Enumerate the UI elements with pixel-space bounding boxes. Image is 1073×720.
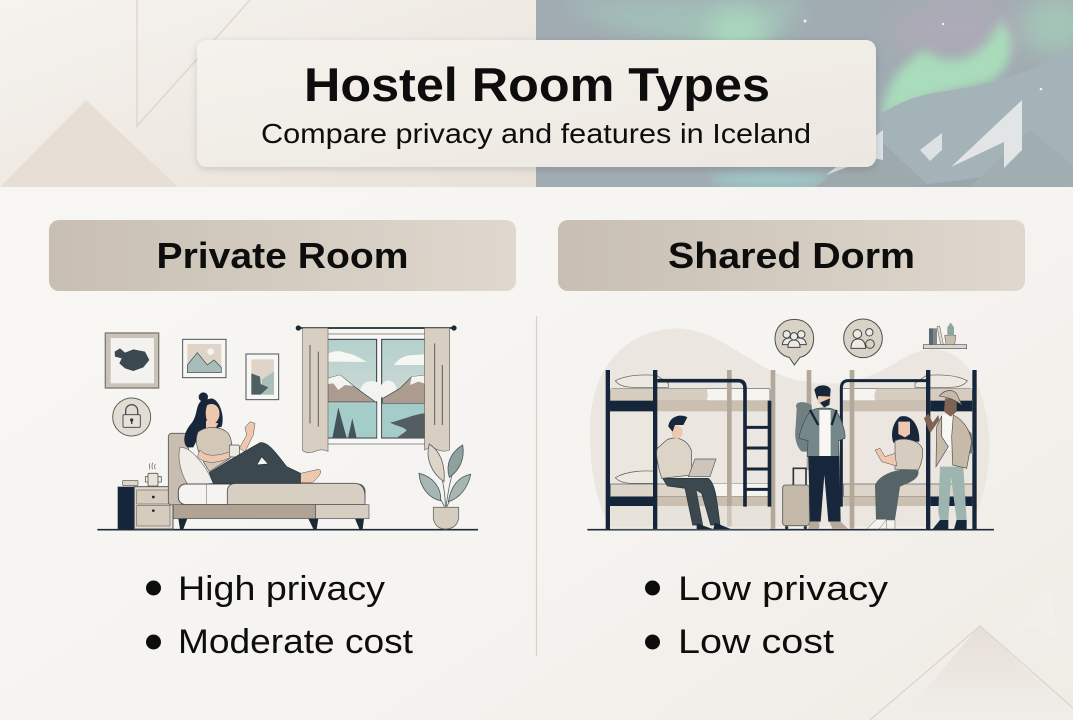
seated woman bbox=[867, 416, 923, 529]
bullet: moderate cost: Moderate cost bbox=[178, 623, 414, 661]
illustration: shared dorm bbox=[587, 319, 994, 530]
panel heading: Private Room: Private Room bbox=[156, 235, 408, 276]
header banner: left neutral mountains bbox=[0, 0, 536, 187]
framed mountain picture bbox=[183, 339, 226, 378]
illustration: private room bbox=[97, 325, 478, 530]
icon: two people bbox=[844, 319, 882, 358]
person relaxing on bed bbox=[184, 392, 321, 483]
window with view bbox=[323, 334, 430, 444]
bottom right decorative mountains bbox=[870, 585, 1073, 720]
background blob bbox=[590, 328, 989, 527]
panel heading: Shared Dorm bbox=[558, 220, 1025, 291]
framed river picture bbox=[246, 354, 279, 400]
nightstand with mug bbox=[118, 463, 173, 529]
person with laptop bbox=[657, 416, 731, 529]
floor line bbox=[97, 527, 478, 532]
standing woman with hat bbox=[924, 390, 973, 529]
bed bbox=[168, 433, 369, 529]
icon: padlock bbox=[113, 398, 151, 436]
title: Hostel Room Types bbox=[304, 58, 770, 111]
speech bubble: group icon bbox=[775, 319, 814, 365]
framed map of Iceland bbox=[105, 333, 159, 388]
plant bbox=[419, 444, 471, 529]
bullet: high privacy: High privacy bbox=[178, 570, 385, 608]
curtain rod bbox=[296, 325, 457, 331]
curtains bbox=[303, 328, 450, 453]
bullet: low cost: Low cost bbox=[678, 623, 835, 661]
title card bbox=[197, 40, 876, 167]
wall shelf bbox=[923, 323, 967, 349]
suitcase bbox=[783, 468, 809, 529]
feature list: shared dorm bbox=[645, 570, 888, 661]
subtitle: Compare privacy and features in Iceland bbox=[261, 118, 811, 149]
bullet: low privacy: Low privacy bbox=[678, 570, 888, 608]
bunk bed left bbox=[606, 370, 775, 529]
feature list: private room bbox=[146, 570, 414, 661]
floor line bbox=[587, 527, 994, 532]
panel heading: Shared Dorm: Shared Dorm bbox=[668, 235, 915, 276]
bunk bed right bbox=[807, 370, 977, 529]
center divider bbox=[536, 316, 538, 656]
man with backpack bbox=[795, 385, 848, 529]
header banner: aurora sky bbox=[536, 0, 1073, 188]
panel heading: Private Room bbox=[49, 220, 516, 291]
